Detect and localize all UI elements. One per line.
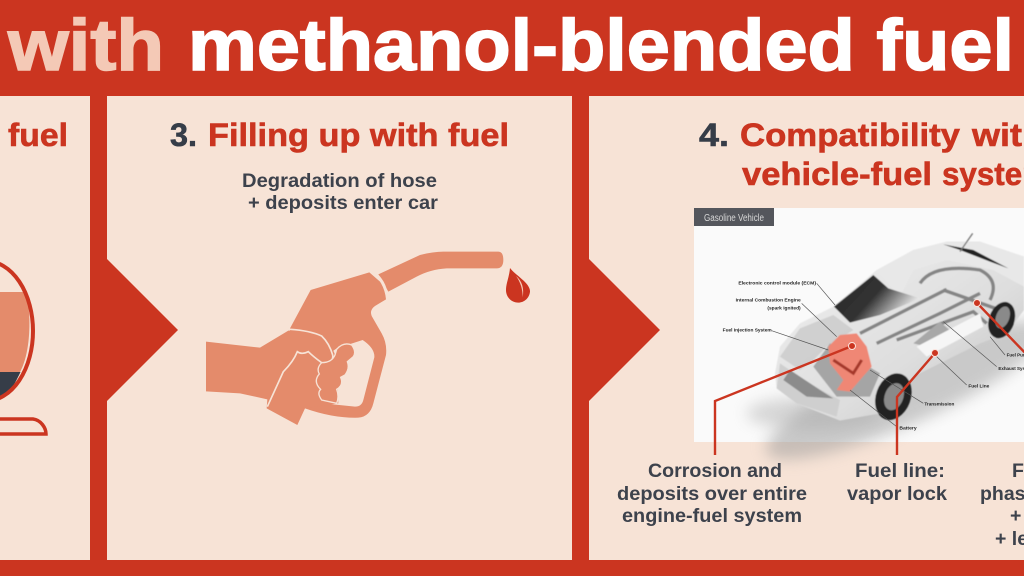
heading: step 4: 4. bbox=[699, 117, 729, 153]
heading: step 2: fuel bbox=[8, 117, 68, 153]
component labels: Electronic control module (ECM) bbox=[738, 280, 817, 285]
heading: step 3: 3. bbox=[170, 117, 197, 153]
component labels: Fuel Line bbox=[968, 384, 990, 389]
text: fuel pump phase separation (cropped): + bbox=[1010, 505, 1021, 527]
text: corrosion and deposits: Corrosion and bbox=[648, 460, 782, 482]
component labels: Fuel Injection System bbox=[723, 327, 772, 332]
heading: step 4 bbox=[699, 117, 1024, 192]
arrow: step 2 to step 3 bbox=[107, 259, 178, 401]
heading: step 3: Filling up with fuel bbox=[208, 117, 509, 153]
title: methanol-blended fuel bbox=[188, 6, 1014, 86]
text: corrosion and deposits: deposits over entire bbox=[617, 483, 807, 505]
component labels: Transmission bbox=[924, 402, 955, 407]
badge: gasoline vehicle bbox=[694, 208, 774, 226]
panel: step 2 (cropped) bbox=[0, 96, 90, 560]
text: degradation of hose bbox=[242, 170, 438, 214]
title: with bbox=[7, 6, 164, 86]
icon: fuel tank flask bbox=[0, 261, 46, 434]
text: fuel line vapor lock: Fuel line: bbox=[855, 460, 945, 482]
panel: step 4 compatibility with vehicle-fuel system bbox=[589, 96, 1024, 560]
text: fuel line vapor lock bbox=[847, 460, 947, 505]
vehicle image bbox=[694, 208, 1024, 483]
engine highlight bbox=[828, 333, 872, 392]
callout lines bbox=[715, 303, 1024, 455]
text: degradation of hose: Degradation of hose bbox=[242, 170, 437, 192]
icon: fuel drop bbox=[506, 268, 530, 303]
car illustration bbox=[723, 233, 1024, 483]
arrow: step 3 to step 4 bbox=[589, 259, 660, 401]
text: degradation of hose: + deposits enter car bbox=[248, 192, 438, 214]
component labels: (spark ignited) bbox=[767, 305, 801, 310]
component labels: Battery bbox=[899, 426, 917, 431]
text: corrosion and deposits bbox=[617, 460, 807, 527]
text: fuel line vapor lock: vapor lock bbox=[847, 483, 947, 505]
text: corrosion and deposits: engine-fuel system bbox=[622, 505, 802, 527]
heading: step 4: vehicle-fuel bbox=[742, 156, 932, 192]
component labels: Internal Combustion Engine bbox=[736, 298, 801, 303]
icon: hand holding fuel pump nozzle bbox=[206, 252, 503, 425]
badge: gasoline vehicle: Gasoline Vehicle bbox=[704, 213, 764, 224]
component labels bbox=[723, 280, 1024, 431]
panel: step 3 filling up with fuel bbox=[107, 96, 572, 560]
text: fuel pump phase separation (cropped) bbox=[980, 460, 1024, 550]
heading: step 4: Compatibility bbox=[740, 117, 960, 153]
callout dots bbox=[848, 300, 980, 356]
